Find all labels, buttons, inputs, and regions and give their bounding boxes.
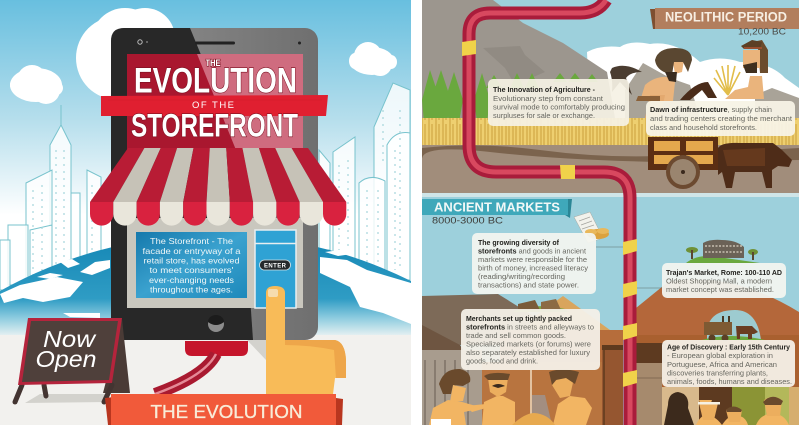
banner: the evolution: THE EVOLUTION [150, 402, 302, 422]
info box: growing diversity: transactions) and state power. [478, 280, 579, 290]
info box: growing diversity: (reading/writing/recording [478, 272, 565, 281]
info box: merchants: trade and sell common goods. [466, 331, 566, 340]
ground shadows [25, 340, 266, 403]
title: STOREFRONT [131, 108, 298, 144]
info box: infrastructure: and trading centers creating the merchant [650, 114, 792, 123]
info box: age of discovery: Age of Discovery : Early 15th Century [667, 342, 791, 352]
text block: storefront definition: ever-changing needs [149, 275, 234, 285]
info box: agriculture: Evolutionary step from constant [493, 94, 603, 103]
info box: agriculture: survival mode to comfortably producing [493, 102, 625, 112]
info box: growing diversity: storefronts and goods in ancient [478, 246, 586, 256]
banner: the evolution [105, 394, 343, 425]
info box: growing diversity [472, 233, 623, 294]
heading: neolithic period [650, 8, 799, 38]
text block: storefront definition [136, 232, 247, 298]
icon: wagon and ox [702, 310, 765, 342]
skyline [0, 83, 410, 290]
market stalls right [636, 343, 799, 425]
heading: neolithic period: 10,200 BC [738, 26, 786, 38]
info box: trajan's market: market concept was established. [666, 285, 774, 294]
icon: home button [208, 315, 224, 332]
heading: ancient markets [422, 199, 572, 224]
info box: agriculture: The Innovation of Agriculture - [493, 85, 595, 94]
title: EVOLUTION [134, 62, 297, 100]
mountains [422, 0, 799, 118]
text block: storefront definition: retail store, has evolved [144, 256, 240, 266]
info box: merchants: also separately established for luxury [466, 348, 590, 357]
text block: storefront definition: The Storefront - The [150, 236, 233, 246]
info box: infrastructure: class and household storefronts. [650, 123, 757, 132]
info box: merchants: storefronts in streets and alleyways to [466, 322, 594, 332]
storefront body [127, 218, 303, 308]
info box: merchants [461, 309, 600, 370]
continents [0, 250, 411, 324]
heading: ancient markets: 8000-3000 BC [432, 216, 503, 226]
figure: farmer right with wheat [714, 40, 768, 99]
clouds [587, 42, 799, 101]
text block: storefront definition: facade or entryway of a [142, 246, 241, 256]
info box: merchants: Specialized markets (or forums) were [466, 340, 591, 348]
info box: trajan's market [636, 263, 786, 298]
market stalls left [422, 325, 623, 425]
info box: agriculture [488, 79, 629, 126]
timeline pipe [462, 0, 637, 425]
icon: colosseum [686, 240, 760, 263]
decorative windows [33, 110, 400, 280]
icon: market huts [518, 299, 565, 312]
info box: age of discovery: - European global exploration in [667, 351, 773, 360]
info box: age of discovery: animals, foods, humans and diseases. [667, 377, 792, 386]
pipe bands [462, 40, 637, 387]
info box: growing diversity: markets were responsible for the [478, 255, 587, 264]
panel: neolithic period [422, 0, 799, 197]
panel: storefront cover [0, 0, 411, 425]
title [131, 58, 298, 144]
info box: infrastructure [646, 101, 795, 136]
icon: document and coins [574, 212, 609, 243]
info box: merchants: goods, food and drink. [466, 356, 538, 366]
icon: cart and ox [648, 137, 792, 189]
hills [422, 280, 799, 387]
panel: ancient markets [422, 197, 799, 425]
ground [422, 145, 799, 197]
now open sign: Now [43, 326, 97, 352]
text block: storefront definition: throughout the ages. [150, 284, 233, 294]
figures: merchants [429, 369, 592, 425]
tablet [111, 28, 318, 340]
figure: farmer left [636, 48, 692, 120]
figures: explorers [664, 392, 789, 425]
title: THE [206, 58, 220, 68]
text block: storefront definition: to meet consumers' [150, 265, 234, 275]
door with enter button [255, 230, 296, 308]
info box: trajan's market: Trajan's Market, Rome: 100-110 AD [666, 268, 783, 277]
icon: pointing hand [266, 286, 346, 394]
heading: ancient markets: ANCIENT MARKETS [434, 200, 560, 214]
info box: trajan's market: Oldest Shopping Mall, a modern [666, 276, 772, 286]
info box: infrastructure: Dawn of infrastructure, supply chain [650, 105, 772, 114]
info box: age of discovery: discoveries transferring plants, [667, 368, 768, 378]
awning [90, 148, 346, 226]
heading: neolithic period: NEOLITHIC PERIOD [665, 10, 787, 24]
wheat field [422, 70, 799, 146]
title: OF THE [192, 100, 234, 111]
connector and tube [155, 341, 248, 394]
info box: merchants: Merchants set up tightly packed [466, 314, 572, 323]
now open sign [15, 318, 130, 402]
info box: growing diversity: birth of money, increased literacy [478, 264, 588, 272]
globe [0, 235, 411, 425]
info box: age of discovery: Portuguese, Africa and American [667, 360, 777, 369]
info box: growing diversity: The growing diversity of [478, 238, 560, 247]
ribbon [101, 95, 328, 116]
info box: age of discovery [636, 340, 795, 387]
cart seat [680, 82, 717, 100]
icon: clouds [10, 8, 397, 104]
door with enter button: ENTER [264, 264, 287, 270]
now open sign: Open [36, 346, 96, 372]
icon: palm [610, 66, 642, 95]
info box: agriculture: surpluses for sale or exchange. [493, 111, 595, 120]
